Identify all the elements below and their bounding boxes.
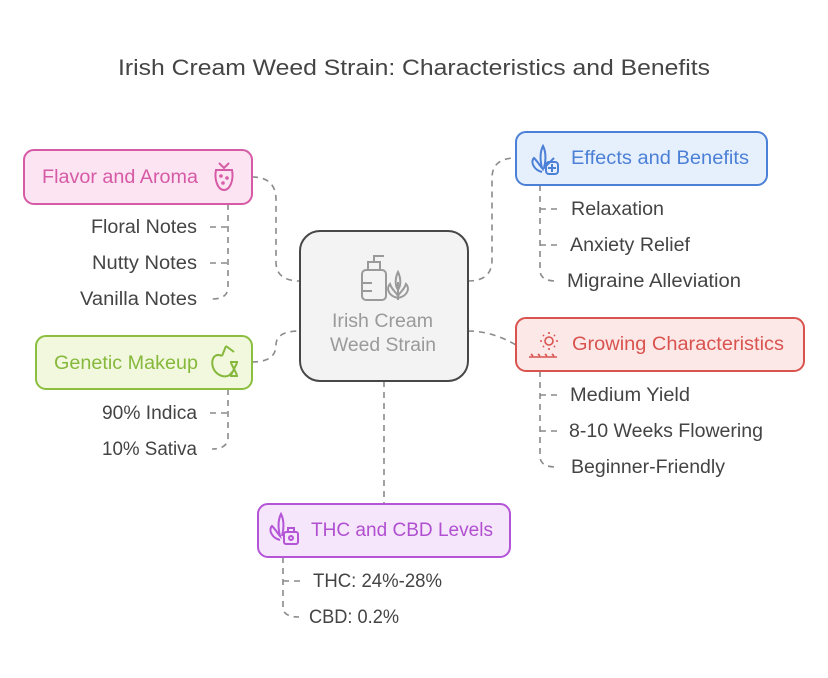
icon: strawberry	[215, 163, 233, 190]
center node	[300, 231, 468, 381]
list: effects: Migraine Alleviation	[567, 271, 741, 292]
panel: genetic makeup	[36, 336, 252, 460]
list: genetics: 90% Indica	[102, 403, 197, 424]
title: Irish Cream Weed Strain: Characteristics and Benefits	[118, 55, 710, 80]
center node: Irish Cream	[332, 311, 433, 332]
panel: thc and cbd levels: THC and CBD Levels	[311, 520, 493, 541]
list: cannabinoids: CBD: 0.2%	[309, 607, 399, 628]
icon: leaf and lock	[270, 514, 298, 544]
icon: apple with dna	[212, 346, 238, 376]
list: flavor notes: Nutty Notes	[92, 253, 197, 274]
center node: Weed Strain	[330, 335, 436, 356]
list: flavor notes: Floral Notes	[91, 217, 197, 238]
list: growing: Beginner-Friendly	[571, 457, 726, 478]
list: genetics: 10% Sativa	[102, 439, 197, 460]
list: growing: Medium Yield	[570, 385, 690, 406]
panel: effects and benefits	[516, 132, 767, 292]
list: flavor notes: Vanilla Notes	[80, 289, 197, 310]
panel: flavor and aroma	[24, 150, 252, 310]
icon: bottle with leaf	[362, 256, 408, 300]
list: effects	[567, 199, 741, 292]
panel: effects and benefits: Effects and Benefits	[571, 148, 749, 169]
icon: sun and soil	[529, 332, 558, 357]
panel: genetic makeup: Genetic Makeup	[54, 353, 198, 374]
panel: growing characteristics	[516, 318, 804, 478]
icon: leaf plus	[532, 146, 558, 174]
list: growing	[569, 385, 763, 478]
list: cannabinoids	[309, 571, 442, 628]
list: genetics	[102, 403, 197, 460]
panel: thc and cbd levels	[258, 504, 510, 628]
list: flavor notes	[80, 217, 197, 310]
panel: growing characteristics: Growing Characteristics	[572, 334, 784, 355]
panel: flavor and aroma: Flavor and Aroma	[42, 167, 198, 188]
list: effects: Anxiety Relief	[570, 235, 691, 256]
list: growing: 8-10 Weeks Flowering	[569, 421, 763, 442]
list: cannabinoids: THC: 24%-28%	[313, 571, 442, 592]
list: effects: Relaxation	[571, 199, 664, 220]
